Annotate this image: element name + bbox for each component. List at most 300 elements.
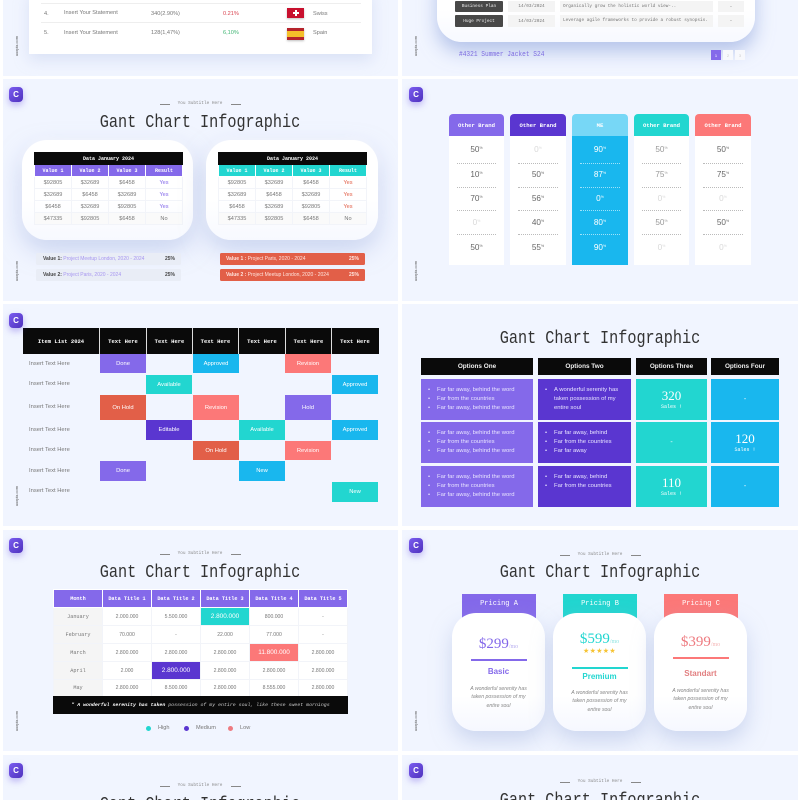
column 5: 0%	[719, 194, 727, 203]
tile on hold	[193, 441, 239, 460]
cell 2-2: Far far away	[554, 448, 587, 454]
rule	[572, 667, 628, 668]
column 1: 50%	[470, 243, 483, 252]
monthly table: 2.800.000	[312, 685, 334, 691]
column me: 90%	[594, 243, 606, 252]
monthly table: 8.500.000	[165, 685, 187, 691]
column 4: 0%	[658, 243, 665, 252]
tile available: Available	[250, 427, 274, 433]
subtitle: You Subtitle Here	[178, 101, 222, 106]
date: 14/03/2024	[518, 4, 545, 9]
cell 2-3: -	[670, 439, 673, 446]
value bar left 1: 25%	[165, 256, 175, 262]
price: $599/mo	[580, 631, 619, 647]
column me	[572, 136, 628, 265]
legend high	[146, 725, 170, 731]
value bar right 1	[220, 253, 365, 265]
cell 3-3	[636, 466, 707, 507]
monthly table: -	[322, 632, 324, 638]
tile approved: Approved	[204, 360, 228, 366]
value bar right 1: 25%	[349, 256, 359, 262]
marker: -	[730, 4, 732, 10]
value bar right 1: Value 1 : Project Paris, 2020 - 2024	[226, 256, 306, 262]
table right: Data January 2024	[267, 156, 318, 162]
row 5 country: Spain	[313, 30, 327, 36]
column 5 header	[695, 114, 751, 136]
brand side text: uxopix.com	[14, 36, 19, 56]
pricing tab b	[563, 594, 637, 618]
header options two: Options Two	[565, 363, 604, 370]
monthly table: 2.000	[121, 668, 133, 674]
legend low	[228, 725, 250, 731]
cell 1-1: Far far away, behind the word	[437, 387, 514, 393]
table right: Value 2	[263, 168, 284, 174]
column 4: 50%	[655, 218, 668, 227]
monthly table: 2.800.000	[263, 668, 285, 674]
legend low: Low	[240, 725, 250, 731]
cell 2-1: Far from the countries	[437, 439, 495, 445]
row labels	[29, 361, 70, 494]
cell 1-3: Sales !	[661, 404, 682, 410]
column 1 header: Other Brand	[458, 122, 495, 128]
cell 1-2: A wonderful serenity has	[554, 387, 618, 393]
label: Huge Project	[463, 18, 495, 24]
cell 3-1: Far from the countries	[437, 483, 495, 489]
tile revision	[285, 441, 331, 460]
tile new	[239, 461, 285, 481]
table left: $32689	[81, 204, 99, 210]
monthly table: 800.000	[265, 614, 283, 620]
description: taken possession of my	[572, 698, 627, 704]
panel: pricing slide	[402, 530, 798, 751]
price: $299/mo	[479, 636, 518, 652]
tile revision: Revision	[205, 404, 227, 410]
value bar left 1	[36, 253, 181, 265]
panel: status gantt grid slide	[3, 304, 398, 526]
cell 1-2: entire soul	[554, 405, 581, 411]
head 2: Text Here	[155, 338, 184, 344]
column 5: 50%	[717, 145, 729, 154]
label 5: Insert Text Here	[29, 447, 70, 453]
table left: $92805	[118, 204, 136, 210]
column 1: 10%	[470, 170, 483, 179]
monthly table: February	[66, 632, 90, 638]
price: $399/mo	[681, 634, 720, 650]
soft card	[437, 0, 755, 42]
row: business plan	[455, 1, 744, 12]
column 2: 0%	[534, 145, 542, 154]
legend high: High	[158, 725, 170, 731]
icon: swiss flag	[287, 8, 304, 18]
tile editable	[146, 420, 192, 440]
cell 3-1: Far far away, behind the word	[437, 492, 514, 498]
table right: $32689	[265, 180, 283, 186]
footer label: #4321 Summer Jacket S24	[459, 50, 544, 59]
cell 3-2	[538, 466, 631, 507]
logo badge: C	[413, 766, 419, 775]
panel: cropped slide bottom right	[402, 755, 798, 800]
table right: Value 1	[226, 168, 248, 174]
subtitle: You Subtitle Here	[578, 779, 622, 784]
logo badge: C	[13, 90, 19, 99]
marker	[718, 1, 744, 12]
value bar right 2	[220, 269, 365, 281]
head 1	[99, 328, 146, 354]
monthly table: 11.800.000	[258, 649, 290, 656]
rating stars: ★★★★★	[583, 647, 616, 655]
rule	[471, 659, 527, 660]
logo badge: C	[413, 90, 419, 99]
header options three: Options Three	[650, 363, 693, 370]
tile available: Available	[157, 382, 181, 388]
table left: $32689	[118, 192, 136, 198]
plan name: Premium	[582, 672, 617, 681]
table right: $6458	[229, 204, 245, 210]
pricing tab b: Pricing B	[581, 600, 619, 608]
pricing card a	[452, 613, 545, 731]
column 2: 40%	[532, 218, 544, 227]
column 2: 55%	[532, 243, 544, 252]
tile new	[332, 482, 378, 502]
cell 2-4: Sales !	[734, 446, 756, 452]
monthly table: -	[322, 614, 324, 620]
monthly table: 8.555.000	[263, 685, 285, 691]
header options two	[538, 358, 631, 375]
header options four: Options Four	[725, 363, 765, 370]
table right: Yes	[343, 180, 353, 186]
cell 3-4: -	[744, 483, 746, 490]
column 2: 50%	[532, 170, 544, 179]
comparison columns	[449, 114, 751, 265]
monthly table: 70.000	[119, 632, 135, 638]
table left: $92805	[81, 216, 99, 222]
header options one	[421, 358, 533, 375]
column 1: 50%	[470, 145, 483, 154]
cell 2-1	[421, 422, 533, 463]
cell 1-2: taken possession of my	[554, 396, 616, 402]
table right: $32689	[228, 192, 246, 198]
column 4: 0%	[658, 194, 665, 203]
tile approved: Approved	[343, 427, 367, 433]
tile done	[100, 354, 146, 373]
tile done: Done	[116, 468, 130, 474]
row 5 number: 5.	[44, 30, 49, 36]
cell 1-3: 320	[662, 388, 681, 402]
description	[560, 15, 713, 27]
table left: Yes	[159, 204, 169, 210]
cell 1-1: Far from the countries	[437, 396, 495, 402]
table right: $6458	[303, 180, 319, 186]
logo badge: C	[13, 541, 19, 550]
cell 2-3	[636, 422, 707, 463]
column 5 header: Other Brand	[705, 122, 741, 128]
pricing card c	[654, 613, 747, 731]
table right: $47335	[228, 216, 246, 222]
quote bar: " A wonderful serenity has taken possession of my entire soul, like these sweet mornings	[71, 702, 330, 708]
tile approved: Approved	[343, 382, 367, 388]
monthly table: March	[70, 650, 86, 656]
value bar right 2: Value 2 : Project Meetup London, 2020 - 2024	[226, 272, 329, 278]
cell 3-1: Far far away, behind the word	[437, 474, 514, 480]
table right: $92805	[265, 216, 283, 222]
tile revision: Revision	[297, 360, 319, 366]
head 6: Text Here	[340, 338, 370, 344]
column me: 90%	[594, 145, 606, 154]
page 2	[723, 50, 733, 60]
table left: $6458	[45, 204, 61, 210]
marker: -	[730, 18, 732, 24]
panel: twin data tables slide	[3, 79, 398, 301]
tile approved	[193, 354, 239, 373]
table right: Yes	[343, 192, 353, 198]
cell 3-2: Far far away, behind	[554, 474, 607, 480]
page 1: 1	[715, 52, 717, 58]
cell 3-3: Sales !	[661, 490, 682, 496]
table left: Value 2	[79, 168, 100, 174]
tile new: New	[349, 489, 361, 495]
panel: cropped slide bottom left	[3, 755, 398, 800]
monthly table: Data Title 4	[255, 596, 293, 602]
tile on hold: On Hold	[205, 448, 227, 454]
legend	[146, 725, 250, 731]
column 4: 75%	[655, 170, 668, 179]
head 4	[238, 328, 285, 354]
brand side text: uxopix.com	[14, 486, 19, 506]
tile hold: Hold	[302, 404, 314, 410]
table left: $6458	[119, 216, 135, 222]
panel: brand comparison slide	[402, 79, 798, 301]
table left: $92805	[44, 180, 62, 186]
tile available	[239, 420, 285, 440]
cell 1-2	[538, 379, 631, 420]
description: Organically grow the holistic world view-..	[563, 4, 676, 9]
monthly table: Data Title 3	[206, 596, 244, 602]
page 3	[735, 50, 745, 60]
tile on hold: On Hold	[112, 404, 134, 410]
column 5: 75%	[717, 170, 729, 179]
column 2: 56%	[532, 194, 544, 203]
tile editable: Editable	[159, 427, 179, 433]
monthly table: Data Title 2	[157, 596, 195, 602]
date: 14/03/2024	[518, 18, 545, 24]
column 1	[449, 136, 504, 265]
value bar right 2: 25%	[349, 272, 359, 278]
title: Gant Chart Infographic	[500, 327, 700, 349]
legend medium: Medium	[196, 725, 216, 731]
logo badge	[409, 87, 423, 102]
monthly table: -	[175, 632, 177, 638]
monthly table: Data Title 1	[108, 596, 146, 602]
table left: $6458	[82, 192, 98, 198]
monthly table: April	[70, 668, 86, 674]
head 3: Text Here	[201, 338, 230, 344]
table right: Result	[339, 168, 357, 174]
logo badge	[9, 87, 23, 102]
pricing card b	[553, 613, 646, 731]
column me: 80%	[594, 218, 606, 227]
head 3	[192, 328, 238, 354]
logo badge	[9, 538, 23, 553]
label 4: Insert Text Here	[29, 427, 70, 433]
column 2 header: Other Brand	[520, 122, 556, 128]
value bar left 2: 25%	[165, 272, 175, 278]
monthly table: 2.800.000	[214, 650, 236, 656]
logo badge: C	[413, 541, 419, 550]
monthly table: Data Title 5	[304, 596, 342, 602]
table left: Value 3	[116, 168, 138, 174]
cell 1-1	[421, 379, 533, 420]
column 1 header	[449, 114, 504, 136]
tile approved	[332, 375, 378, 394]
row 4 number: 4.	[44, 11, 49, 17]
cell 3-4	[711, 466, 779, 507]
header options three	[636, 358, 707, 375]
table left: $6458	[119, 180, 135, 186]
table left: Result	[155, 168, 173, 174]
subtitle: You Subtitle Here	[178, 783, 222, 788]
title: Gant Chart Infographic	[100, 561, 300, 583]
header options four	[711, 358, 779, 375]
panel: statement table slide	[3, 0, 398, 76]
date	[508, 1, 555, 12]
cell 2-1: Far far away, behind the word	[437, 448, 514, 454]
tile hold	[285, 395, 331, 420]
table right: Yes	[343, 204, 353, 210]
logo badge	[409, 763, 423, 778]
gantt header	[23, 328, 379, 354]
cell 1-3	[636, 379, 707, 420]
cell 2-4	[711, 422, 779, 463]
white table card	[29, 0, 372, 54]
row 5 value: 128(1,47%)	[151, 30, 180, 36]
label	[455, 15, 503, 27]
logo badge	[409, 538, 423, 553]
table right: Value 3	[300, 168, 322, 174]
legend medium	[184, 725, 216, 731]
description: entire soul	[689, 705, 712, 711]
monthly table: 2.800.000	[165, 650, 187, 656]
description: taken possession of my	[673, 696, 728, 702]
row 5 statement: Insert Your Statement	[64, 30, 118, 36]
column 1: 70%	[470, 194, 483, 203]
title: Gant Chart Infographic	[500, 561, 700, 583]
column 4	[634, 136, 689, 265]
table right: $92805	[302, 204, 320, 210]
head item: Item List 2024	[38, 338, 84, 344]
column 5: 50%	[717, 218, 729, 227]
monthly table: 2.800.000	[214, 685, 236, 691]
monthly table: 2.800.000	[214, 668, 236, 674]
panel: options grid slide	[402, 304, 798, 526]
column me header	[572, 114, 628, 136]
brand side text: uxopix.com	[14, 711, 19, 731]
label 2: Insert Text Here	[29, 381, 70, 387]
monthly table: January	[67, 614, 89, 620]
value bar left 1: Value 1: Project Meetup London, 2020 - 2024	[43, 256, 144, 262]
monthly table: 77.000	[266, 632, 282, 638]
table left: Data January 2024	[83, 156, 134, 162]
table left: $32689	[44, 192, 62, 198]
tile revision	[285, 354, 331, 373]
monthly table: May	[73, 685, 83, 691]
column me: 0%	[596, 194, 604, 203]
column 2 header	[510, 114, 566, 136]
row 4 country: Swiss	[313, 11, 328, 17]
cell 3-2: Far from the countries	[554, 483, 612, 489]
row 4 percent: 0.21%	[223, 11, 239, 17]
row 4 statement: Insert Your Statement	[64, 10, 118, 16]
head 5	[285, 328, 331, 354]
monthly table: 2.000.000	[116, 614, 138, 620]
panel: project table slide	[402, 0, 798, 76]
value bar left 2: Value 2: Project Paris, 2020 - 2024	[43, 272, 121, 278]
brand side text: uxopix.com	[413, 711, 418, 731]
pricing tab c	[664, 594, 738, 618]
label: Business Plan	[462, 4, 496, 9]
head 5: Text Here	[294, 338, 323, 344]
row: huge project	[455, 15, 744, 27]
brand side text: uxopix.com	[14, 261, 19, 281]
cell 1-4: -	[744, 396, 746, 403]
description	[672, 688, 729, 711]
table left: $47335	[44, 216, 62, 222]
column 1: 0%	[473, 218, 480, 227]
column 2	[510, 136, 566, 265]
monthly table: 5.500.000	[165, 614, 187, 620]
page 1	[711, 50, 721, 60]
cell 2-4: 120	[735, 430, 755, 446]
cell 1-4	[711, 379, 779, 420]
column 4 header: Other Brand	[643, 122, 680, 128]
table right: $32689	[302, 192, 320, 198]
quote bar	[53, 696, 348, 714]
row 5 percent: 6,10%	[223, 30, 239, 36]
page 3: 3	[739, 52, 741, 58]
table right	[218, 152, 367, 224]
label	[455, 1, 503, 12]
head 1: Text Here	[108, 338, 138, 344]
cell 1-1: Far far away, behind the word	[437, 405, 514, 411]
description: A wonderful serenity has	[672, 688, 729, 694]
column 4 header	[634, 114, 689, 136]
tile done: Done	[116, 360, 130, 366]
cell 3-1	[421, 466, 533, 507]
logo badge: C	[13, 766, 19, 775]
cell 2-1: Far far away, behind the word	[437, 430, 514, 436]
tile done	[100, 461, 146, 481]
table left: Yes	[159, 192, 169, 198]
description: Leverage agile frameworks to provide a robust synopsis.	[563, 18, 708, 23]
monthly table	[53, 589, 348, 697]
monthly table: 2.800.000	[116, 650, 138, 656]
title: Gant Chart Infographic	[100, 111, 300, 133]
tile revision	[193, 395, 239, 420]
row 4 value: 340(2.90%)	[151, 11, 180, 17]
description	[571, 690, 628, 713]
rule	[673, 657, 729, 658]
head 4: Text Here	[247, 338, 277, 344]
pricing tab a: Pricing A	[480, 600, 518, 608]
column 5: 0%	[719, 243, 727, 252]
table right: $6458	[266, 192, 282, 198]
label 6: Insert Text Here	[29, 468, 70, 474]
table right: $92805	[228, 180, 246, 186]
tile revision: Revision	[297, 448, 319, 454]
table left: Yes	[159, 180, 169, 186]
description: A wonderful serenity has	[470, 686, 527, 692]
column 5	[695, 136, 751, 265]
logo badge	[9, 763, 23, 778]
